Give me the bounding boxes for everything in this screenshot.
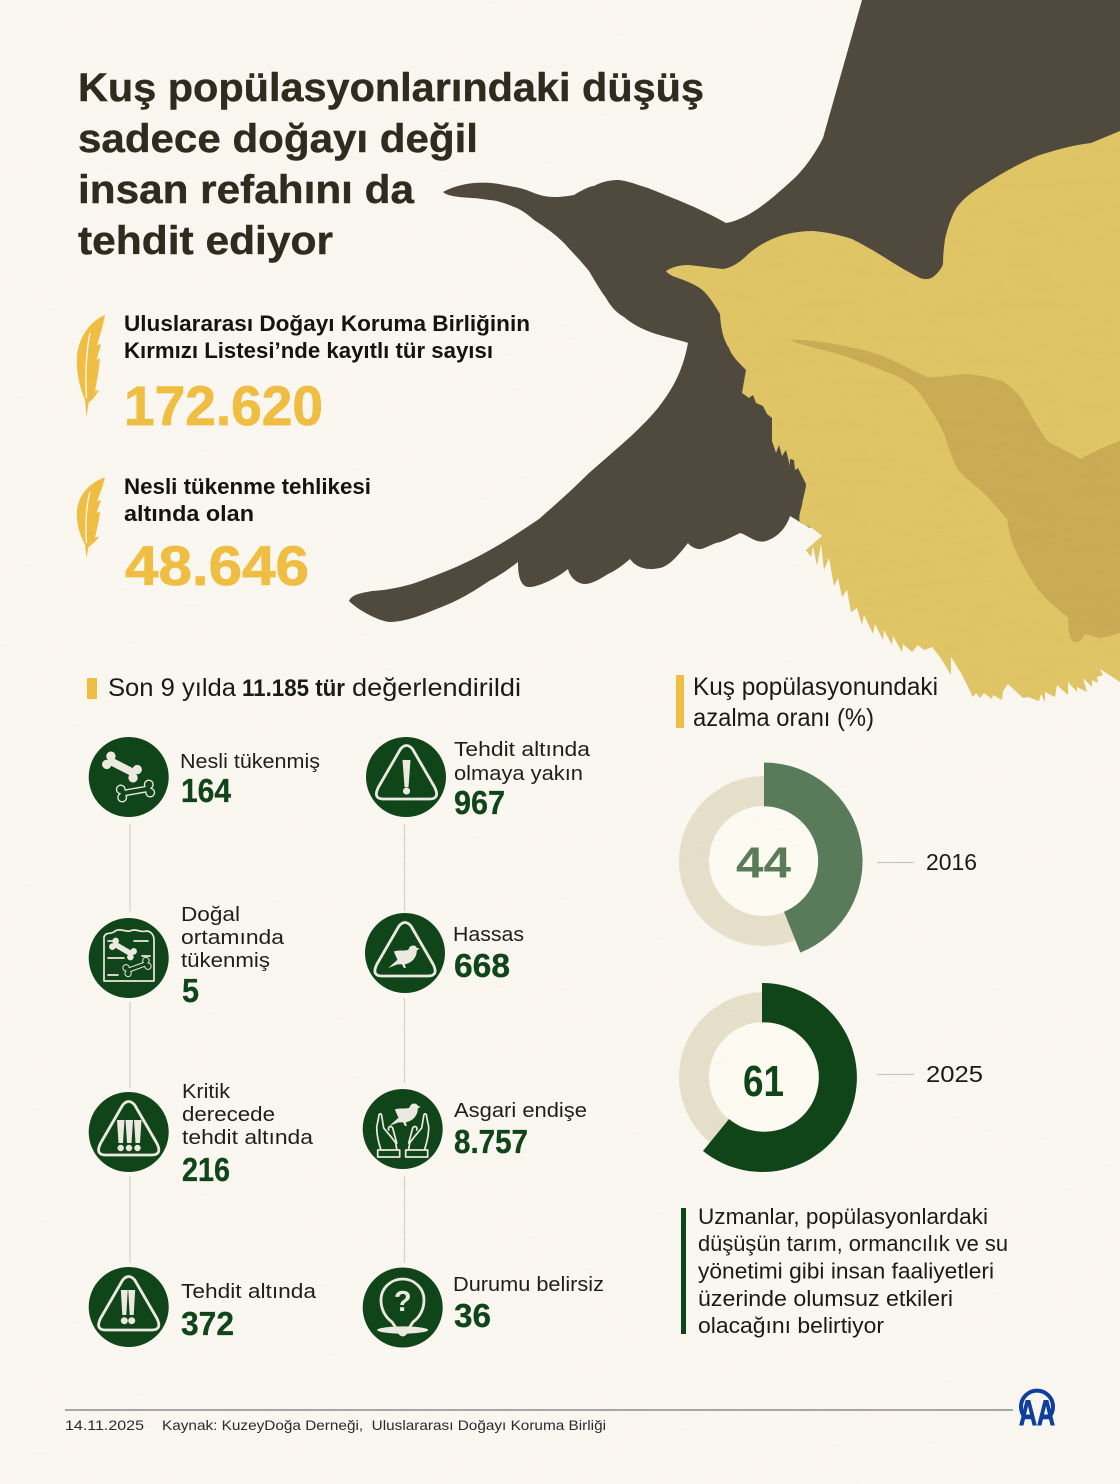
label and count: Asgari endişe [454,1100,587,1122]
title: Kuş popülasyonlarındaki düşüş [78,66,704,110]
category: critically endangered [89,1081,314,1188]
label and count [453,1274,604,1334]
year label [877,849,977,875]
label and count: 372 [181,1305,234,1342]
dark hummingbird silhouette [349,0,1120,622]
stat: endangered species [77,474,371,597]
year label: 2025 [926,1061,983,1087]
icon: question pin: ? [394,1286,412,1318]
heading: decline rate [676,673,938,732]
footer [65,1391,1055,1433]
label and count: Hassas [453,924,524,946]
icon: warning [366,737,446,817]
donut chart: 2016 [679,762,977,953]
heading: decline rate: azalma oranı (%) [693,704,874,732]
footer: 14.11.2025 [65,1417,144,1433]
label and count [182,1081,314,1188]
text block: experts note: olacağını belirtiyor [698,1313,884,1338]
label and count: Durumu belirsiz [453,1274,604,1296]
title: insan refahını da [78,168,415,212]
heading: species assessed: değerlendirildi [352,674,521,702]
icon: question pin [363,1268,443,1348]
label and count: 164 [181,772,232,809]
heading: species assessed: 11.185 tür [242,675,345,702]
label and count [180,751,320,809]
label and count: olmaya yakın [454,763,583,785]
footer: Kaynak: KuzeyDoğa Derneği, Uluslararası Doğayı Koruma Birliği [162,1417,606,1433]
yellow bird silhouette [666,131,1120,702]
small hummingbird inside yellow bird [790,340,1120,642]
icon: bird in warning triangle [365,913,445,993]
label and count: 5 [182,972,199,1009]
label and count: Tehdit altında [454,739,591,761]
label and count: Kritik [182,1081,231,1103]
label and count: 967 [454,784,505,821]
label and count: tükenmiş [181,950,270,972]
logo: AA: AA [1019,1394,1055,1433]
stat label: Uluslararası Doğayı Koruma Birliğinin [124,311,530,336]
value: 44 [736,838,792,888]
category: near threatened [366,737,591,821]
stat label [124,311,530,363]
text block: experts note: yönetimi gibi insan faaliyetleri [698,1258,994,1284]
category: extinct [89,737,320,817]
label and count: 36 [454,1297,491,1334]
label and count: Tehdit altında [181,1281,317,1303]
stat label: altında olan [124,501,254,526]
text block: experts note: düşüşün tarım, ormancılık ve su [698,1231,1008,1256]
category: vulnerable [365,913,524,993]
illustration: bird silhouettes [349,0,1120,702]
stat label: Nesli tükenme tehlikesi [124,474,371,499]
label and count: ortamında [181,927,285,949]
label and count: derecede [182,1104,275,1126]
label and count [181,1281,317,1342]
icon: feather [77,315,105,417]
label and count [454,739,591,821]
icon: bones in earth [89,918,169,998]
label and count: 668 [454,947,510,984]
heading: species assessed [87,674,521,702]
connector lines [130,824,404,1263]
icon: double warning [89,1267,169,1347]
text block: experts note [681,1204,1008,1338]
year label [877,1061,983,1087]
category: endangered [89,1267,317,1347]
label and count: tehdit altında [182,1127,314,1149]
icon: feather [77,477,105,558]
label and count [453,924,524,984]
stat number: 48.646 [125,534,309,597]
donut chart: 2025 [679,983,983,1172]
title: tehdit ediyor [78,219,333,263]
category: least concern [363,1089,587,1169]
label and count: 8.757 [454,1123,528,1160]
title [78,66,704,263]
icon: bones [89,737,169,817]
value: 61 [743,1057,784,1106]
text block: experts note: üzerinde olumsuz etkileri [698,1286,953,1311]
logo: AA [1019,1391,1055,1433]
stat: red list species [77,311,530,437]
stat number: 172.620 [124,374,323,437]
label and count [454,1100,587,1160]
stat label [124,474,371,526]
text block: experts note: Uzmanlar, popülasyonlardaki [698,1204,988,1229]
label and count: 216 [182,1151,230,1188]
label and count [181,904,285,1009]
heading: decline rate: Kuş popülasyonundaki [693,673,938,701]
icon: triple warning [89,1092,169,1172]
label and count: Doğal [181,904,240,926]
label and count: Nesli tükenmiş [180,751,320,773]
stat label: Kırmızı Listesi’nde kayıtlı tür sayısı [124,338,493,363]
heading: species assessed: Son 9 yılda [108,674,236,702]
year label: 2016 [926,849,977,875]
title: sadece doğayı değil [78,117,478,161]
category: data deficient [363,1268,604,1348]
icon: bird in hands [363,1089,443,1169]
category: extinct in the wild [89,904,285,1009]
